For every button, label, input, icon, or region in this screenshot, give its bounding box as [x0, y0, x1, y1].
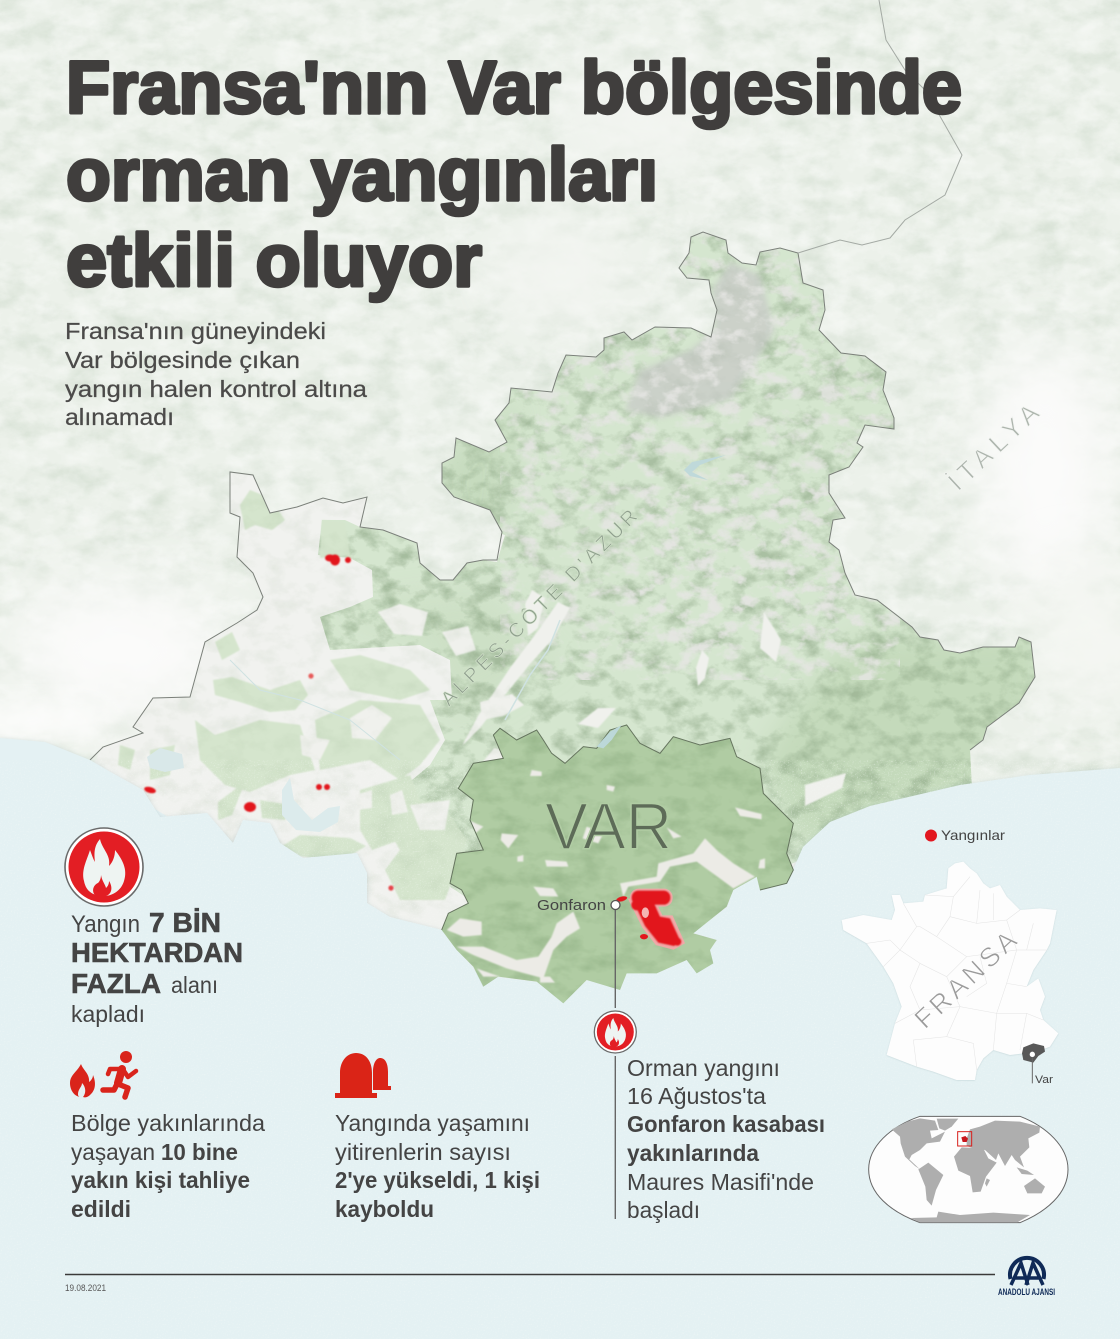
text: burned area: 7 BİN	[149, 907, 221, 938]
label: Fransa: FRANSA	[909, 925, 1023, 1034]
lagoons	[147, 748, 184, 772]
title: Fransa'nın Var bölgesinde	[66, 46, 962, 129]
subtitle: yangın halen kontrol altına	[65, 376, 367, 402]
Gonfaron location marker and label: Gonfaron	[537, 898, 606, 914]
title	[66, 46, 962, 302]
title: etkili oluyor	[66, 219, 482, 302]
date: 19.08.2021	[65, 1283, 106, 1294]
text: evacuation: Bölge yakınlarında	[71, 1110, 265, 1136]
text: burned area: HEKTARDAN	[71, 937, 243, 968]
subtitle: Fransa'nın güneyindeki	[65, 318, 326, 344]
icon: big fire badge	[65, 828, 143, 906]
text: fire start	[627, 1055, 825, 1223]
fire spots west	[143, 554, 394, 891]
text: burned area: Yangın	[71, 911, 140, 938]
text: evacuation: yaşayan	[71, 1139, 155, 1165]
France highlight box	[958, 1132, 972, 1146]
subtitle	[65, 318, 367, 430]
text: fire start: Gonfaron kasabası	[627, 1111, 825, 1137]
high mountain grey rock	[625, 262, 775, 418]
label: VAR: VAR	[545, 789, 672, 863]
text: burned area: FAZLA	[71, 968, 161, 999]
text: burned area	[71, 907, 243, 1027]
sea	[0, 738, 1120, 1339]
title: orman yangınları	[66, 133, 658, 216]
text: casualties: Yangında yaşamını	[335, 1110, 530, 1136]
text: fire start: 16 Ağustos'ta	[627, 1083, 766, 1109]
text: fire start: Maures Masifi'nde	[627, 1169, 814, 1195]
text: casualties	[335, 1110, 540, 1222]
lake at Var north	[597, 725, 622, 748]
icon: small fire badge	[594, 1011, 636, 1053]
patches of green west	[118, 490, 467, 900]
text: evacuation: 10 bine	[161, 1139, 238, 1165]
region border	[90, 232, 1035, 760]
valleys and open land	[462, 590, 846, 806]
text: casualties: kayboldu	[335, 1196, 434, 1222]
text: evacuation	[71, 1110, 265, 1222]
text: evacuation: edildi	[71, 1196, 131, 1222]
logo: Anadolu Ajansı: ANADOLU AJANSI	[998, 1287, 1055, 1297]
map background: land outside the region	[0, 0, 1120, 790]
Gonfaron location marker and label	[537, 898, 620, 1008]
label: Alpes-Côte d'Azur: ALPES-CÔTE D'AZUR	[436, 505, 642, 711]
text: fire start: başladı	[627, 1197, 700, 1223]
label: İtalya: İTALYA	[942, 397, 1045, 496]
country border France-Italy	[798, 0, 962, 253]
footer rule	[65, 1274, 995, 1276]
text: burned area: kapladı	[71, 1001, 145, 1027]
text: burned area: alanı	[171, 972, 218, 998]
icon: flame and running person	[70, 1051, 136, 1097]
logo: Anadolu Ajansı	[998, 1258, 1055, 1297]
leader line from badge to text	[614, 1056, 616, 1219]
text: casualties: 2'ye yükseldi, 1 kişi	[335, 1167, 540, 1193]
locator map: France	[842, 862, 1058, 1086]
Var border	[442, 725, 793, 930]
locator map: world	[869, 1116, 1068, 1223]
text: fire start: Orman yangını	[627, 1055, 780, 1081]
text: fire start: yakınlarında	[627, 1140, 759, 1166]
fire area near Gonfaron	[616, 889, 683, 948]
text: casualties: yitirenlerin sayısı	[335, 1139, 511, 1165]
subtitle: Var bölgesinde çıkan	[65, 347, 300, 373]
map: Var department	[440, 720, 810, 1007]
pale open land in Var	[447, 770, 765, 983]
map: Provence-Alpes-Côte d'Azur region	[90, 232, 1036, 982]
legend: fires: Yangınlar	[941, 827, 1005, 843]
Var on locator	[1022, 1043, 1045, 1063]
green forest and Alps area	[318, 232, 1034, 896]
text: evacuation: yakın kişi tahliye	[71, 1167, 250, 1193]
icon: tombstones	[335, 1053, 391, 1098]
subtitle: alınamadı	[65, 404, 174, 430]
lake and river	[684, 455, 726, 480]
label: Var small: Var	[1035, 1074, 1053, 1086]
